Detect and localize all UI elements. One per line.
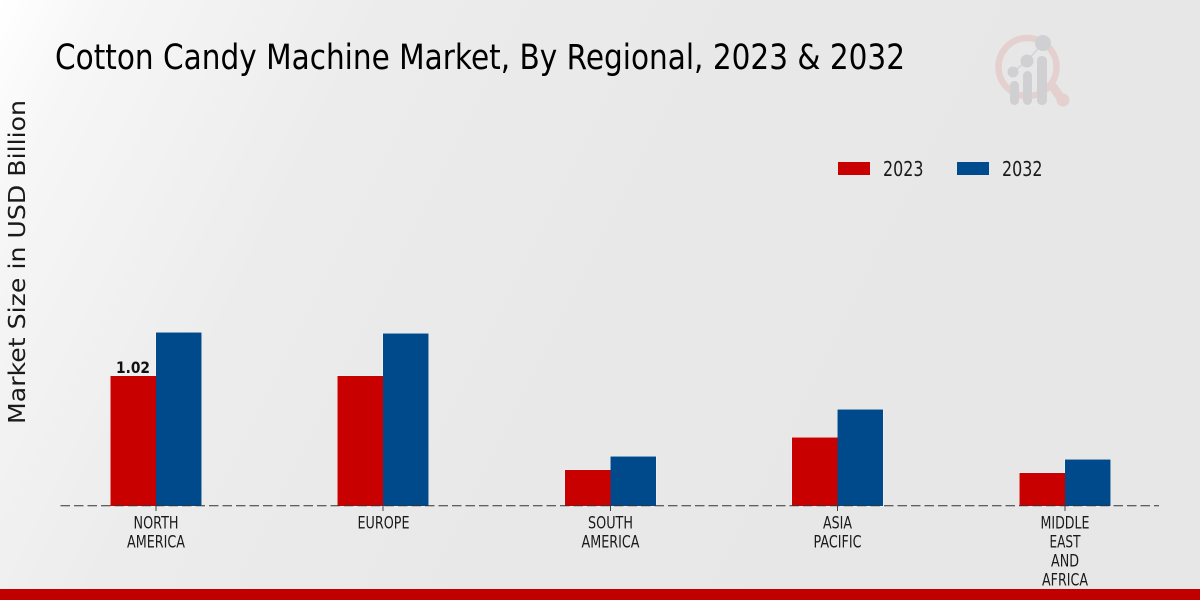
legend: 2032 xyxy=(957,157,1042,181)
value label: 1.02 xyxy=(116,358,150,377)
footer bar xyxy=(0,589,1200,600)
label: South America: AMERICA xyxy=(582,532,640,552)
x axis baseline xyxy=(60,506,1159,511)
icon: magnifier logo watermark xyxy=(998,35,1070,106)
group: Asia Pacific xyxy=(792,410,883,506)
label: Asia Pacific: ASIA xyxy=(823,514,852,534)
label: Asia Pacific: PACIFIC xyxy=(814,532,862,552)
x axis labels xyxy=(127,514,1090,590)
group: North America xyxy=(110,332,202,506)
label: North America: AMERICA xyxy=(127,532,185,552)
label: Middle East and Africa: AND xyxy=(1051,552,1079,572)
title: Cotton Candy Machine Market, By Regional, 2023 & 2032 xyxy=(55,38,905,78)
label: Middle East and Africa: EAST xyxy=(1050,532,1081,552)
y axis title: Market Size in USD Billion xyxy=(5,100,31,424)
group: Middle East and Africa xyxy=(1020,460,1110,506)
legend: 2023 xyxy=(838,157,924,181)
group: Europe xyxy=(338,334,428,506)
bar chart xyxy=(110,332,1110,506)
label: Middle East and Africa: MIDDLE xyxy=(1040,514,1090,534)
label: South America: SOUTH xyxy=(588,514,633,534)
legend: 2032: 2032 xyxy=(1002,157,1042,181)
label: Europe: EUROPE xyxy=(358,514,410,534)
legend: 2023: 2023 xyxy=(883,157,924,181)
group: South America xyxy=(565,456,656,506)
label: Middle East and Africa: AFRICA xyxy=(1042,570,1088,590)
label: North America: NORTH xyxy=(134,514,178,534)
legend xyxy=(838,157,1042,181)
